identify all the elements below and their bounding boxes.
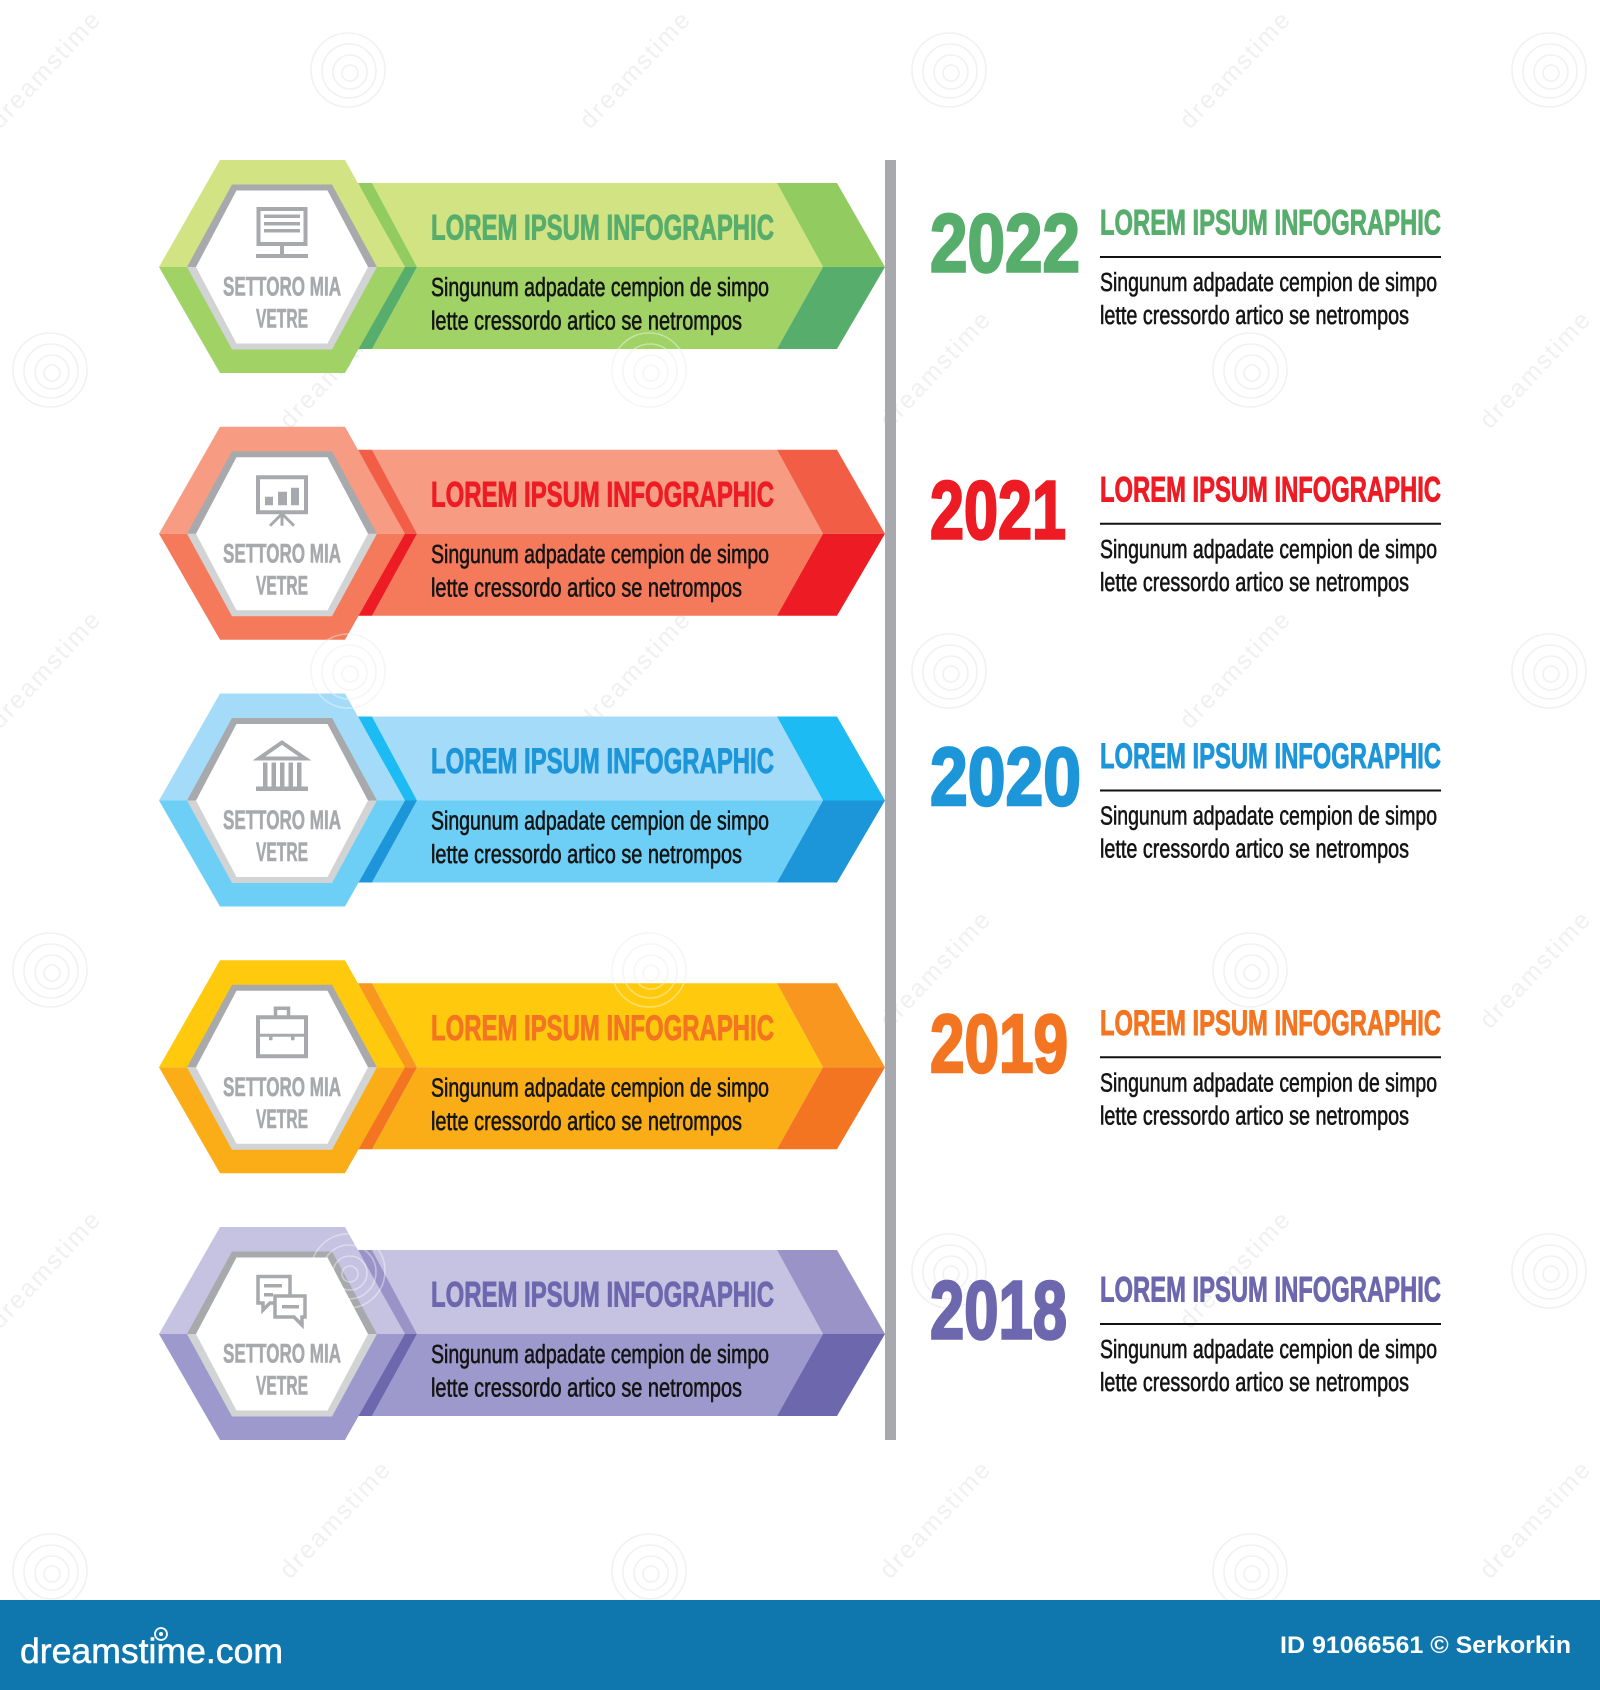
hexagon label: SETTORO MIA [223, 1072, 341, 1102]
icon: bank building [256, 742, 308, 791]
right heading: LOREM IPSUM INFOGRAPHIC [1100, 1270, 1441, 1310]
right heading: LOREM IPSUM INFOGRAPHIC [1100, 1004, 1441, 1043]
band text [431, 1341, 769, 1402]
watermark layer: dreamstime [274, 1455, 397, 1584]
right text: Singunum adpadate cempion de simpo [1100, 536, 1437, 564]
row: 2018 [159, 1227, 1441, 1440]
watermark layer: dreamstime [874, 1455, 997, 1584]
band text: Singunum adpadate cempion de simpo [431, 541, 769, 569]
watermark layer: dreamstime [1474, 305, 1597, 434]
band heading: LOREM IPSUM INFOGRAPHIC [431, 208, 774, 248]
watermark layer: dreamstime [874, 305, 997, 434]
row: 2019 [159, 960, 1441, 1173]
hexagon badge [159, 160, 405, 373]
hexagon label [223, 538, 341, 600]
year: 2022 [930, 196, 1080, 290]
hexagon label: VETRE [256, 1104, 308, 1134]
arrow band [358, 716, 885, 882]
row: 2020 [159, 694, 1441, 906]
watermark layer: dreamstime [1174, 5, 1297, 134]
band text: lette cressordo artico se netrompos [431, 1374, 742, 1402]
right text: lette cressordo artico se netrompos [1100, 1369, 1409, 1397]
icon: chat bubbles [258, 1276, 305, 1325]
right text: Singunum adpadate cempion de simpo [1100, 1069, 1437, 1097]
hexagon badge [159, 427, 405, 640]
band heading: LOREM IPSUM INFOGRAPHIC [431, 742, 774, 781]
hexagon label: SETTORO MIA [223, 1338, 341, 1368]
band text [431, 541, 769, 602]
band text [431, 274, 769, 336]
hexagon label: SETTORO MIA [223, 272, 341, 302]
band text: lette cressordo artico se netrompos [431, 841, 742, 869]
right text: Singunum adpadate cempion de simpo [1100, 269, 1437, 297]
icon: monitor [256, 209, 308, 258]
watermark layer: dreamstime [874, 905, 997, 1034]
band text: lette cressordo artico se netrompos [431, 1108, 742, 1136]
arrow band [358, 450, 885, 616]
right heading: LOREM IPSUM INFOGRAPHIC [1100, 737, 1441, 776]
right heading: LOREM IPSUM INFOGRAPHIC [1100, 470, 1441, 509]
right text: lette cressordo artico se netrompos [1100, 302, 1409, 330]
year: 2020 [930, 730, 1081, 823]
right text: lette cressordo artico se netrompos [1100, 1102, 1409, 1130]
hexagon label [223, 272, 341, 334]
band text [431, 808, 769, 869]
band text [431, 1074, 769, 1136]
overlaid white watermark spirals [311, 333, 686, 1308]
year: 2019 [930, 997, 1068, 1090]
band heading: LOREM IPSUM INFOGRAPHIC [431, 1276, 774, 1314]
watermark layer: dreamstime [1174, 1205, 1297, 1334]
arrow band [358, 1250, 885, 1416]
timeline vertical axis [885, 160, 896, 1440]
icon: presentation board [258, 477, 306, 526]
watermark layer: dreamstime [574, 5, 697, 134]
right text: lette cressordo artico se netrompos [1100, 836, 1409, 864]
band heading: LOREM IPSUM INFOGRAPHIC [431, 475, 774, 514]
right text [1100, 269, 1437, 330]
hexagon label: VETRE [256, 837, 308, 867]
hexagon label: VETRE [256, 304, 308, 334]
right text [1100, 1336, 1437, 1397]
band text: Singunum adpadate cempion de simpo [431, 1074, 769, 1102]
hexagon label [223, 1072, 341, 1134]
footer credit: ID 91066561 © Serkorkin [1280, 1632, 1571, 1659]
year: 2021 [930, 463, 1066, 556]
band text: lette cressordo artico se netrompos [431, 574, 742, 602]
hexagon badge [159, 960, 405, 1173]
watermark layer: dreamstime [574, 605, 697, 734]
hexagon label: SETTORO MIA [223, 538, 341, 568]
footer logo: dreamstime.com [20, 1632, 283, 1671]
right text: Singunum adpadate cempion de simpo [1100, 802, 1437, 830]
watermark layer: dreamstime [1174, 605, 1297, 734]
hexagon label [223, 805, 341, 867]
hexagon label [223, 1338, 341, 1400]
right text: Singunum adpadate cempion de simpo [1100, 1336, 1437, 1364]
hexagon badge [159, 1227, 405, 1440]
arrow band [358, 983, 885, 1149]
row: 2021 [159, 427, 1441, 640]
right text: lette cressordo artico se netrompos [1100, 569, 1409, 597]
right heading: LOREM IPSUM INFOGRAPHIC [1100, 204, 1441, 242]
right text [1100, 536, 1437, 597]
year: 2018 [930, 1264, 1067, 1356]
watermark layer: dreamstime [1474, 1455, 1597, 1584]
hexagon label: SETTORO MIA [223, 805, 341, 835]
band text: lette cressordo artico se netrompos [431, 308, 742, 336]
icon: briefcase [258, 1008, 306, 1056]
band text: Singunum adpadate cempion de simpo [431, 1341, 769, 1369]
hexagon badge [159, 694, 405, 906]
hexagon label: VETRE [256, 1370, 308, 1400]
footer bar [0, 1600, 1600, 1690]
band text: Singunum adpadate cempion de simpo [431, 808, 769, 836]
right text [1100, 1069, 1437, 1130]
watermark layer: dreamstime [1474, 905, 1597, 1034]
arrow band [358, 183, 885, 349]
hexagon label: VETRE [256, 570, 308, 600]
row: 2022 [159, 160, 1441, 373]
right text [1100, 802, 1437, 864]
band heading: LOREM IPSUM INFOGRAPHIC [431, 1009, 774, 1048]
band text: Singunum adpadate cempion de simpo [431, 274, 769, 302]
watermark layer: dreamstime [274, 305, 397, 434]
